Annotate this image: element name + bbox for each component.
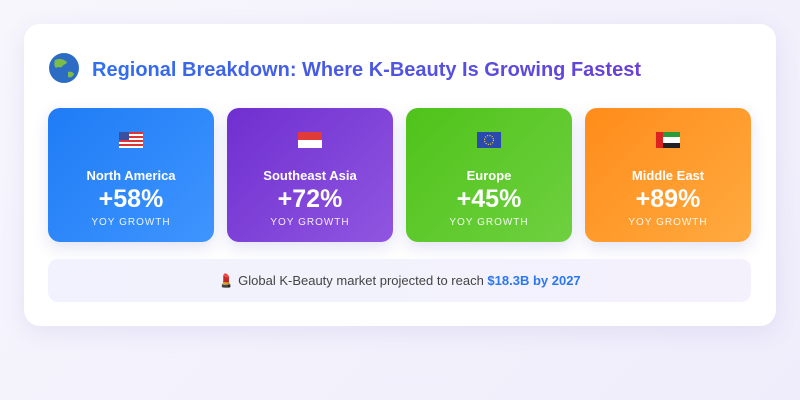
icon: globe xyxy=(49,53,79,83)
main panel xyxy=(24,24,776,326)
card: Southeast Asia: Southeast Asia xyxy=(263,168,357,183)
card: Southeast Asia: +72% xyxy=(278,185,342,213)
card: North America: YOY GROWTH xyxy=(91,217,171,228)
card: Europe: YOY GROWTH xyxy=(449,217,529,228)
icon: US flag xyxy=(119,132,143,148)
card: Middle East xyxy=(585,108,751,242)
icon: EU flag xyxy=(477,132,501,148)
title: Regional Breakdown: Where K-Beauty Is Growing Fastest xyxy=(92,59,641,81)
card: Middle East: +89% xyxy=(636,185,700,213)
icon: Singapore flag xyxy=(298,132,322,148)
icon: UAE flag xyxy=(656,132,680,148)
callout: market projection: 💄 Global K-Beauty market projected to reach $18.3B by 2027 xyxy=(218,273,581,288)
card: Middle East: Middle East xyxy=(632,168,704,183)
card: Middle East: YOY GROWTH xyxy=(628,217,708,228)
card: North America: +58% xyxy=(99,185,163,213)
card: North America xyxy=(48,108,214,242)
card: Southeast Asia xyxy=(227,108,393,242)
card: North America: North America xyxy=(86,168,176,183)
card: Europe xyxy=(406,108,572,242)
callout: market projection xyxy=(48,259,751,302)
card: Southeast Asia: YOY GROWTH xyxy=(270,217,350,228)
card: Europe: +45% xyxy=(457,185,521,213)
title xyxy=(49,53,641,83)
card: Europe: Europe xyxy=(467,168,511,183)
